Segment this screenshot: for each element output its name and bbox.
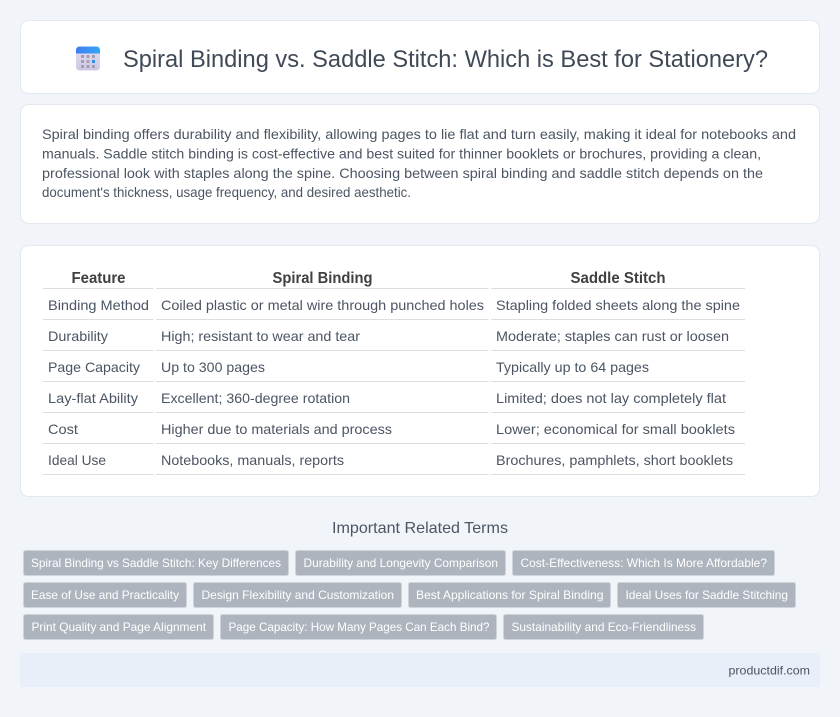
tag row 3: Print Quality and Page Alignment (32, 620, 207, 634)
tag row 3: Page Capacity: How Many Pages Can Each Bind? (228, 620, 490, 634)
table row: lay-flat ability: Lay-flat Ability (48, 390, 138, 406)
table row: page capacity: Typically up to 64 pages (496, 359, 649, 375)
table row: ideal use (48, 452, 733, 468)
tag row 3: Sustainability and Eco-Friendliness (512, 620, 696, 634)
text block: introduction paragraph: professional look with staples along the spine. Choosing between spiral binding and saddle stitch depends on the (42, 165, 763, 181)
tag row 1 (24, 550, 774, 576)
table row: page capacity (48, 359, 649, 375)
table header: Saddle Stitch (570, 270, 666, 287)
table row: ideal use: Notebooks, manuals, reports (161, 452, 344, 468)
table row: page capacity: Up to 300 pages (161, 359, 265, 375)
text block: introduction paragraph: manuals. Saddle stitch binding is cost-effective and best suited for thinner booklets or brochures, providing a clean, (42, 146, 761, 162)
tag row 1: Cost-Effectiveness: Which Is More Affordable? (520, 556, 767, 570)
table row: binding method (48, 297, 740, 313)
tag row 1: Spiral Binding vs Saddle Stitch: Key Differences (31, 556, 281, 570)
table row: binding method: Stapling folded sheets along the spine (496, 297, 740, 313)
panel: comparison table (20, 246, 820, 496)
table row: lay-flat ability: Excellent; 360-degree rotation (161, 390, 350, 406)
tag row 1: Durability and Longevity Comparison (304, 556, 498, 570)
table header: Spiral Binding (272, 270, 372, 287)
panel: introduction (20, 104, 820, 224)
table header: Feature (72, 270, 126, 287)
tag row 2: Best Applications for Spiral Binding (416, 588, 604, 602)
tag row 2: Ideal Uses for Saddle Stitching (626, 588, 788, 602)
related term tags (24, 550, 796, 640)
text block: introduction paragraph (42, 126, 796, 200)
tag row 2 (24, 582, 796, 608)
table row: page capacity: Page Capacity (48, 359, 140, 375)
table row: lay-flat ability (48, 390, 726, 406)
panel: header (20, 20, 820, 94)
table row: durability (48, 328, 729, 344)
table row: durability: Durability (48, 328, 108, 344)
table row: binding method: Coiled plastic or metal wire through punched holes (161, 297, 484, 313)
title: Spiral Binding vs. Saddle Stitch: Which is Best for Stationery? (123, 46, 768, 73)
table row: durability: Moderate; staples can rust or loosen (496, 328, 729, 344)
table row: binding method: Binding Method (48, 297, 149, 313)
table row: ideal use: Ideal Use (48, 452, 106, 468)
table row: ideal use: Brochures, pamphlets, short booklets (496, 452, 733, 468)
table row: cost: Cost (48, 421, 78, 437)
table row: cost: Lower; economical for small booklets (496, 421, 735, 437)
footer (20, 653, 820, 687)
heading: important related terms: Important Related Terms (332, 520, 508, 537)
table header (72, 270, 666, 287)
text block: introduction paragraph: document's thickness, usage frequency, and desired aesthetic. (42, 184, 411, 200)
text block: introduction paragraph: Spiral binding offers durability and flexibility, allowing pages to lie flat and turn easily, making it ideal for notebooks and (42, 126, 796, 142)
icon: calendar (76, 46, 100, 70)
tag row 2: Design Flexibility and Customization (202, 588, 394, 602)
table row: durability: High; resistant to wear and tear (161, 328, 360, 344)
table row: cost: Higher due to materials and process (161, 421, 392, 437)
table row: lay-flat ability: Limited; does not lay completely flat (496, 390, 726, 406)
tag row 3 (24, 614, 704, 640)
tag row 2: Ease of Use and Practicality (31, 588, 179, 602)
table row: cost (48, 421, 735, 437)
footer source: productdif.com (728, 664, 810, 678)
